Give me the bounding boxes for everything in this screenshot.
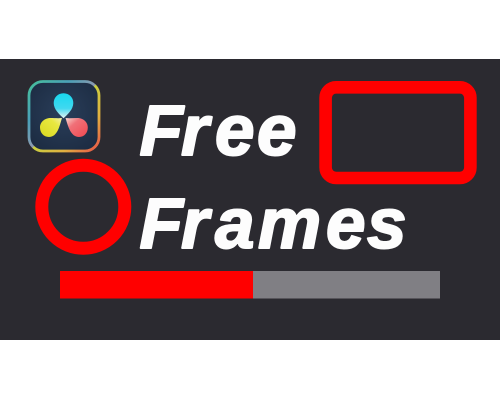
icon: DaVinci Resolve logo: [29, 82, 99, 151]
dark background panel: [0, 59, 500, 340]
title: Frames: Frames: [140, 185, 406, 264]
icon: yellow petal: [40, 118, 62, 137]
progress bar: [60, 271, 440, 298]
progress bar track: [60, 271, 440, 298]
icon: red petal: [66, 118, 88, 137]
icon: cyan petal: [54, 93, 73, 118]
red circle frame: [42, 165, 125, 248]
title: Free: Free: [140, 92, 296, 171]
progress bar fill: [60, 271, 253, 298]
red rounded rectangle frame: [326, 87, 470, 178]
